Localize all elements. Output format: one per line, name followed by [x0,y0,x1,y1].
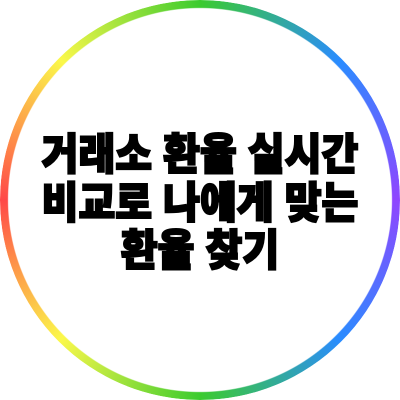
title line 2: 비교로 나에게 맞는 [42,180,358,227]
title line 1: 거래소 환율 실시간 [42,132,358,179]
title line 3: 환율 찾기 [121,228,279,275]
title [41,132,358,275]
